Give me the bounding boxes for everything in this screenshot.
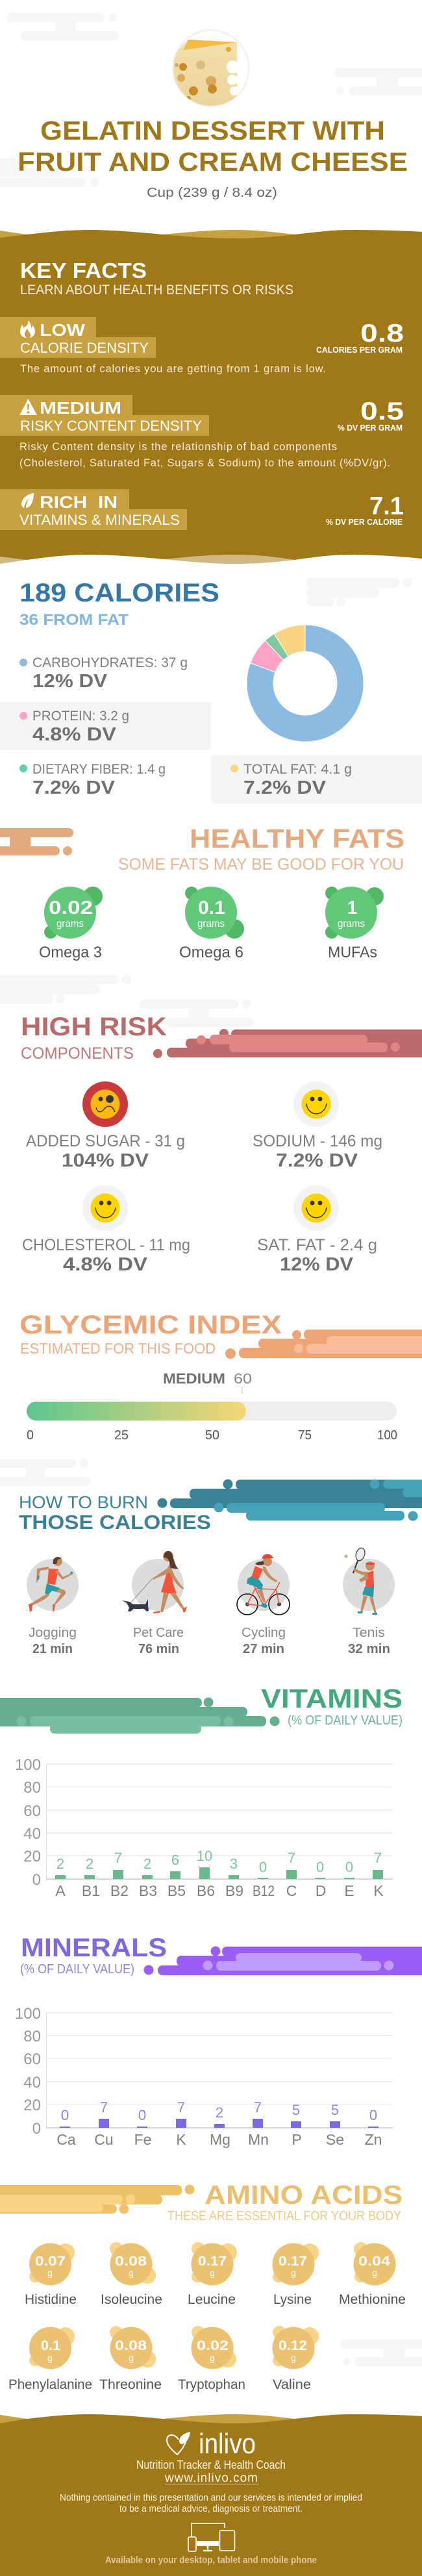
heading: amino acids: AMINO ACIDS bbox=[205, 2180, 403, 2210]
chart: vitamins bar chart: 0 bbox=[345, 1859, 353, 1875]
chart: minerals bar chart: K bbox=[176, 2131, 186, 2148]
amino: isoleucine: 0.08 bbox=[115, 2254, 147, 2269]
chart: minerals bar chart: Mn bbox=[248, 2131, 269, 2148]
chart: vitamins bar chart: A bbox=[55, 1882, 66, 1899]
chart: minerals bar chart: 5 bbox=[331, 2102, 339, 2118]
title bbox=[18, 116, 408, 177]
chart: vitamins bar chart: 2 bbox=[143, 1856, 151, 1872]
chart: minerals bar chart: Ca bbox=[56, 2131, 76, 2148]
disclaimer: Nothing contained in this presentation and our services is intended or implied bbox=[60, 2492, 362, 2503]
icon: leaf bbox=[21, 493, 34, 508]
risk item: saturated fat: SAT. FAT - 2.4 g bbox=[257, 1236, 377, 1254]
fact: medium risky content density: (Cholesterol, Saturated Fat, Sugars & Sodium) to the amount (%DV/gr). bbox=[19, 457, 390, 469]
legend: protein: PROTEIN: 3.2 g bbox=[32, 709, 129, 724]
amino: phenylalanine: 0.1 bbox=[41, 2338, 60, 2353]
chart: minerals bar chart: Cu bbox=[94, 2131, 114, 2148]
stat: omega 3: grams bbox=[56, 918, 84, 929]
amino: leucine: 0.17 bbox=[198, 2254, 227, 2269]
activity: pet care bbox=[122, 1551, 187, 1656]
stat: omega 3: 0.02 bbox=[49, 898, 93, 918]
subheading: healthy fats: SOME FATS MAY BE GOOD FOR YOU bbox=[118, 855, 404, 874]
gauge: glycemic index bbox=[27, 1370, 397, 1443]
panel: key facts bbox=[0, 230, 422, 564]
amino: phenylalanine bbox=[8, 2327, 92, 2392]
chart: minerals bar chart: 40 bbox=[23, 2074, 41, 2091]
amino: lysine: g bbox=[291, 2267, 296, 2278]
risk item: sodium: SODIUM - 146 mg bbox=[253, 1132, 382, 1150]
chart: minerals bar chart: 0 bbox=[138, 2107, 146, 2123]
stat: mufas bbox=[325, 887, 384, 961]
legend: dietary fiber bbox=[19, 762, 166, 798]
legend: carbohydrates: 12% DV bbox=[32, 671, 108, 692]
fact: low calorie density: The amount of calories you are getting from 1 gram is low. bbox=[20, 363, 326, 375]
chart: vitamins bar chart: 7 bbox=[114, 1850, 122, 1866]
fact: medium risky content density: % DV PER GRAM bbox=[338, 423, 403, 433]
stat: omega 6: 0.1 bbox=[198, 898, 225, 918]
stat: omega 3: Omega 3 bbox=[39, 944, 102, 961]
fact: low calorie density: CALORIE DENSITY bbox=[20, 340, 149, 356]
chart: vitamins bar chart: 6 bbox=[171, 1852, 179, 1868]
heading: vitamins: VITAMINS bbox=[261, 1684, 403, 1713]
chart: minerals bar chart bbox=[15, 2005, 393, 2148]
legend: dietary fiber: 7.2% DV bbox=[32, 777, 116, 798]
subheading: vitamins: (% OF DAILY VALUE) bbox=[288, 1713, 403, 1728]
stat: mufas: 1 bbox=[347, 898, 357, 918]
amino: threonine: 0.08 bbox=[115, 2338, 147, 2353]
activity: jogging bbox=[27, 1557, 79, 1656]
chart: vitamins bar chart: 7 bbox=[374, 1850, 382, 1866]
subheading: key facts: LEARN ABOUT HEALTH BENEFITS OR RISKS bbox=[20, 283, 293, 297]
icon: devices bbox=[188, 2523, 235, 2551]
heading: high risk: HIGH RISK bbox=[21, 1013, 167, 1041]
chart: minerals bar chart: 7 bbox=[177, 2099, 185, 2115]
fact: low calorie density bbox=[0, 317, 404, 375]
heading: healthy fats: HEALTHY FATS bbox=[190, 824, 404, 853]
stat: omega 6: Omega 6 bbox=[179, 944, 243, 961]
chart: vitamins bar chart: B9 bbox=[225, 1882, 243, 1899]
stat: omega 6 bbox=[179, 887, 244, 961]
chart: minerals bar chart: 80 bbox=[23, 2028, 41, 2045]
risk item: saturated fat: 12% DV bbox=[280, 1254, 354, 1275]
chart: vitamins bar chart bbox=[15, 1756, 393, 1899]
activity: cycling: 27 min bbox=[243, 1642, 284, 1656]
risk item: cholesterol bbox=[22, 1185, 190, 1275]
chart: vitamins bar chart: 80 bbox=[23, 1779, 41, 1797]
fact: medium risky content density: Risky Content density is the relationship of bad components bbox=[19, 441, 337, 453]
chart: minerals bar chart: Zn bbox=[365, 2131, 382, 2148]
gauge: glycemic index: 100 bbox=[377, 1428, 397, 1443]
activity: tennis: 32 min bbox=[348, 1642, 390, 1656]
chart: minerals bar chart: 60 bbox=[23, 2051, 41, 2068]
activity: pet care: 76 min bbox=[138, 1642, 179, 1656]
amino: lysine bbox=[273, 2243, 319, 2307]
chart: macronutrient donut bbox=[247, 625, 364, 742]
chart: vitamins bar chart: 0 bbox=[32, 1871, 41, 1889]
amino: leucine: Leucine bbox=[188, 2292, 236, 2307]
disclaimer: to be a medical advice, diagnosis or treatment. bbox=[119, 2503, 303, 2514]
amino: valine bbox=[273, 2326, 319, 2392]
chart: minerals bar chart: 2 bbox=[216, 2104, 223, 2121]
amino: phenylalanine: Phenylalanine bbox=[8, 2377, 92, 2392]
fact: medium risky content density bbox=[0, 395, 404, 469]
risk item: cholesterol: 4.8% DV bbox=[63, 1254, 148, 1275]
legend: carbohydrates: CARBOHYDRATES: 37 g bbox=[32, 655, 188, 670]
chart: vitamins bar chart: 0 bbox=[316, 1859, 324, 1875]
banner: vitamins bbox=[0, 1698, 279, 1734]
fact: rich in vitamins and minerals: % DV PER CALORIE bbox=[326, 518, 403, 527]
chart: vitamins bar chart: B12 bbox=[253, 1882, 275, 1899]
banner: minerals bbox=[144, 1946, 422, 1975]
logo: inlivo: inlivo bbox=[199, 2428, 256, 2460]
icon: cheese photo bbox=[169, 29, 250, 110]
fact: rich in vitamins and minerals bbox=[0, 489, 404, 530]
amino: threonine: Threonine bbox=[99, 2377, 162, 2392]
heading: how to burn those calories: THOSE CALORIES bbox=[19, 1511, 211, 1534]
chart: vitamins bar chart: 20 bbox=[23, 1848, 41, 1865]
legend: total fat: 7.2% DV bbox=[243, 777, 327, 798]
gauge: glycemic index: 50 bbox=[205, 1428, 219, 1443]
amino: histidine: 0.07 bbox=[35, 2254, 66, 2269]
chart: vitamins bar chart: 2 bbox=[56, 1856, 64, 1872]
stat: omega 3 bbox=[39, 887, 103, 961]
amino: methionine bbox=[339, 2242, 406, 2307]
amino: histidine: g bbox=[47, 2267, 53, 2278]
activity: pet care: Pet Care bbox=[133, 1626, 184, 1640]
chart: vitamins bar chart: B2 bbox=[110, 1882, 129, 1899]
chart: minerals bar chart: Fe bbox=[134, 2131, 151, 2148]
title: GELATIN DESSERT WITH bbox=[40, 116, 385, 145]
amino: isoleucine bbox=[101, 2242, 162, 2307]
chart: vitamins bar chart: K bbox=[373, 1882, 384, 1899]
title: FRUIT AND CREAM CHEESE bbox=[18, 147, 408, 177]
fact: low calorie density: LOW bbox=[40, 320, 86, 340]
risk item: added sugar: ADDED SUGAR - 31 g bbox=[26, 1132, 185, 1150]
amino: valine: g bbox=[291, 2353, 296, 2363]
chart: vitamins bar chart: 7 bbox=[288, 1850, 295, 1866]
gauge: glycemic index: 0 bbox=[27, 1428, 34, 1443]
activity: cycling bbox=[237, 1554, 290, 1656]
chart: vitamins bar chart: D bbox=[316, 1882, 326, 1899]
amino: valine: 0.12 bbox=[279, 2338, 307, 2353]
heading: calories: 189 CALORIES bbox=[19, 579, 219, 607]
amino: tryptophan: 0.02 bbox=[197, 2338, 229, 2353]
subheading: calories from fat: 36 FROM FAT bbox=[19, 611, 129, 629]
amino: threonine: g bbox=[129, 2353, 134, 2363]
chart: vitamins bar chart: 40 bbox=[23, 1825, 41, 1843]
chart: vitamins bar chart: 2 bbox=[86, 1856, 93, 1872]
banner: glycemic index bbox=[225, 1330, 422, 1359]
chart: vitamins bar chart: B1 bbox=[82, 1882, 100, 1899]
activity: tennis bbox=[343, 1547, 395, 1656]
chart: vitamins bar chart: E bbox=[344, 1882, 354, 1899]
amino: valine: Valine bbox=[273, 2377, 311, 2392]
stat: omega 6: grams bbox=[197, 918, 225, 929]
chart: vitamins bar chart: B5 bbox=[168, 1882, 186, 1899]
banner: burn calories bbox=[157, 1480, 422, 1521]
risk item: saturated fat bbox=[257, 1185, 377, 1275]
amino: phenylalanine: g bbox=[47, 2353, 53, 2363]
amino: threonine bbox=[99, 2326, 162, 2392]
amino: tryptophan bbox=[178, 2326, 245, 2392]
fact: medium risky content density: RISKY CONTENT DENSITY bbox=[20, 418, 202, 434]
heading: how to burn those calories: HOW TO BURN bbox=[19, 1493, 148, 1512]
chart: minerals bar chart: 0 bbox=[32, 2120, 41, 2138]
chart: vitamins bar chart: B6 bbox=[197, 1882, 215, 1899]
amino: isoleucine: g bbox=[129, 2267, 134, 2278]
activity: tennis: Tenis bbox=[353, 1626, 385, 1640]
amino: methionine: 0.04 bbox=[358, 2254, 390, 2269]
amino: leucine: g bbox=[210, 2267, 215, 2278]
subheading: glycemic index: ESTIMATED FOR THIS FOOD bbox=[20, 1340, 216, 1357]
panel: footer bbox=[0, 2414, 422, 2576]
legend: total fat bbox=[211, 755, 422, 803]
chart: minerals bar chart: 20 bbox=[23, 2097, 41, 2114]
stat: mufas: grams bbox=[338, 918, 365, 929]
amino: lysine: Lysine bbox=[273, 2292, 312, 2307]
activity: jogging: Jogging bbox=[29, 1626, 77, 1640]
subheading: minerals: (% OF DAILY VALUE) bbox=[20, 1962, 134, 1976]
chart: vitamins bar chart: C bbox=[286, 1882, 297, 1899]
chart: vitamins bar chart: 100 bbox=[15, 1756, 41, 1774]
chart: minerals bar chart: 5 bbox=[292, 2102, 300, 2118]
gauge: glycemic index: 60 bbox=[234, 1370, 252, 1387]
heading: how to burn those calories bbox=[19, 1493, 211, 1534]
amino: leucine bbox=[188, 2242, 237, 2307]
amino: lysine: 0.17 bbox=[279, 2254, 307, 2269]
risk item: cholesterol: CHOLESTEROL - 11 mg bbox=[22, 1236, 190, 1254]
amino: histidine bbox=[25, 2243, 77, 2307]
serving size: Cup (239 g / 8.4 oz) bbox=[147, 186, 277, 200]
amino: histidine: Histidine bbox=[25, 2292, 77, 2307]
logo: inlivo bbox=[167, 2428, 256, 2460]
amino: tryptophan: Tryptophan bbox=[178, 2377, 245, 2392]
fact: medium risky content density: MEDIUM bbox=[40, 398, 121, 418]
website link: www.inlivo.com bbox=[164, 2471, 258, 2485]
chart: minerals bar chart: 100 bbox=[15, 2005, 41, 2023]
legend: protein: 4.8% DV bbox=[32, 724, 117, 745]
gauge: glycemic index: 25 bbox=[114, 1428, 129, 1443]
banner: high risk bbox=[153, 1029, 422, 1058]
fact: rich in vitamins and minerals: 7.1 bbox=[369, 492, 404, 520]
chart: vitamins bar chart: 0 bbox=[259, 1859, 267, 1875]
chart: vitamins bar chart: 60 bbox=[23, 1802, 41, 1820]
chart: minerals bar chart: 7 bbox=[100, 2099, 108, 2115]
risk item: added sugar bbox=[26, 1081, 185, 1171]
legend: dietary fiber: DIETARY FIBER: 1.4 g bbox=[32, 762, 166, 777]
legend: carbohydrates bbox=[19, 655, 188, 692]
tagline: Nutrition Tracker & Health Coach bbox=[136, 2458, 286, 2471]
chart: vitamins bar chart: 3 bbox=[230, 1856, 238, 1872]
fact: low calorie density: CALORIES PER GRAM bbox=[316, 346, 403, 355]
fact: low calorie density: 0.8 bbox=[360, 320, 404, 347]
chart: minerals bar chart: 0 bbox=[369, 2107, 377, 2123]
chart: vitamins bar chart: 10 bbox=[197, 1848, 212, 1864]
activity: jogging: 21 min bbox=[32, 1642, 73, 1656]
chart: minerals bar chart: Se bbox=[326, 2131, 344, 2148]
amino: tryptophan: g bbox=[210, 2353, 215, 2363]
chart: minerals bar chart: Mg bbox=[210, 2131, 230, 2148]
icon: warning triangle bbox=[19, 399, 37, 415]
gauge: glycemic index: MEDIUM bbox=[163, 1370, 225, 1387]
subheading: amino acids: THESE ARE ESSENTIAL FOR YOUR BODY bbox=[168, 2209, 401, 2223]
heading: glycemic index: GLYCEMIC INDEX bbox=[19, 1311, 282, 1339]
risk item: added sugar: 104% DV bbox=[62, 1150, 149, 1171]
fact: rich in vitamins and minerals: VITAMINS & MINERALS bbox=[19, 512, 180, 528]
fact: rich in vitamins and minerals: RICH IN bbox=[40, 492, 118, 512]
fact: medium risky content density: 0.5 bbox=[360, 398, 404, 425]
legend: protein bbox=[0, 702, 211, 750]
banner: healthy fats bbox=[0, 828, 73, 855]
risk item: sodium: 7.2% DV bbox=[276, 1150, 358, 1171]
heading: minerals: MINERALS bbox=[21, 1934, 167, 1962]
risk item: sodium bbox=[253, 1081, 382, 1171]
chart: vitamins bar chart: B3 bbox=[139, 1882, 157, 1899]
banner: amino acids bbox=[0, 2185, 195, 2214]
amino: methionine: Methionine bbox=[339, 2292, 406, 2307]
gauge: glycemic index: 75 bbox=[298, 1428, 312, 1443]
icon: flame bbox=[20, 320, 35, 338]
disclaimer bbox=[60, 2492, 362, 2514]
legend: total fat: TOTAL FAT: 4.1 g bbox=[243, 762, 352, 777]
subheading: components: COMPONENTS bbox=[21, 1044, 134, 1063]
availability note: Available on your desktop, tablet and mobile phone bbox=[105, 2555, 317, 2566]
stat: mufas: MUFAs bbox=[328, 944, 377, 961]
chart: minerals bar chart: 0 bbox=[61, 2107, 69, 2123]
amino: isoleucine: Isoleucine bbox=[101, 2292, 162, 2307]
amino: methionine: g bbox=[372, 2267, 377, 2278]
heading: key facts: KEY FACTS bbox=[20, 259, 147, 283]
activity: cycling: Cycling bbox=[242, 1626, 286, 1640]
chart: minerals bar chart: P bbox=[292, 2131, 302, 2148]
chart: minerals bar chart: 7 bbox=[254, 2099, 262, 2115]
